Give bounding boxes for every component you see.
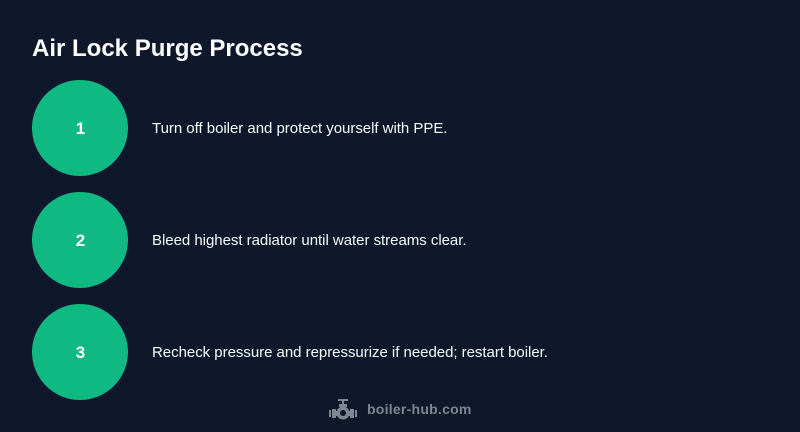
footer logo and site name <box>329 399 472 420</box>
step 1 text: Turn off boiler and protect yourself with PPE. <box>152 120 447 137</box>
step 1 circle <box>32 80 128 176</box>
title: Air Lock Purge Process <box>32 35 303 62</box>
site name: boiler-hub.com <box>367 401 472 417</box>
step 3 circle: 3 <box>76 343 85 362</box>
icon: valve <box>329 399 357 420</box>
step 2 text: Bleed highest radiator until water streams clear. <box>152 232 467 249</box>
step 3 circle <box>32 304 128 400</box>
step 2 circle: 2 <box>76 231 85 250</box>
step 3 text: Recheck pressure and repressurize if needed; restart boiler. <box>152 344 548 361</box>
step 2 circle <box>32 192 128 288</box>
step 1 circle: 1 <box>76 119 85 138</box>
